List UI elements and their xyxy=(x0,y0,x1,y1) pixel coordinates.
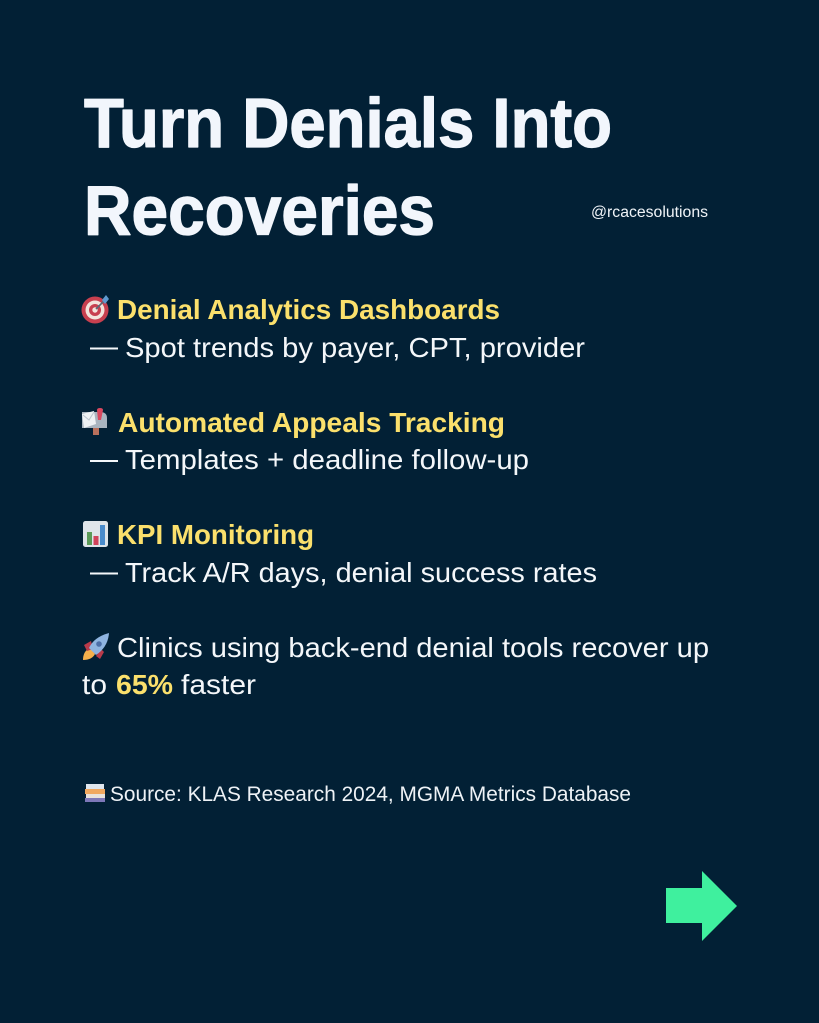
description: Templates + deadline follow-up xyxy=(125,444,529,475)
callout: recovery statistic: 65% xyxy=(116,669,173,700)
icon: books xyxy=(85,784,105,802)
source line: Source: KLAS Research 2024, MGMA Metrics Database xyxy=(110,782,631,806)
title: Recoveries xyxy=(84,172,435,250)
item: denial analytics dashboards xyxy=(82,294,585,363)
description: Track A/R days, denial success rates xyxy=(125,557,597,588)
callout: recovery statistic: faster xyxy=(181,669,256,700)
item: KPI monitoring xyxy=(83,519,597,588)
icon: bar chart xyxy=(83,521,108,547)
arrow xyxy=(666,871,737,941)
handle: @rcacesolutions xyxy=(591,204,708,221)
item: automated appeals tracking xyxy=(82,407,529,475)
description: Spot trends by payer, CPT, provider xyxy=(125,332,585,363)
icon: rocket xyxy=(83,633,109,660)
heading: Denial Analytics Dashboards xyxy=(117,294,500,325)
callout: recovery statistic: Clinics using back-end denial tools recover up xyxy=(117,632,709,663)
icon: mailbox xyxy=(82,408,107,435)
title: Turn Denials Into xyxy=(84,84,612,162)
heading: Automated Appeals Tracking xyxy=(118,407,505,438)
callout: recovery statistic: to xyxy=(82,669,107,700)
title xyxy=(84,84,612,250)
callout: recovery statistic xyxy=(82,632,709,700)
icon: bullseye target xyxy=(82,295,109,324)
heading: KPI Monitoring xyxy=(117,519,314,550)
